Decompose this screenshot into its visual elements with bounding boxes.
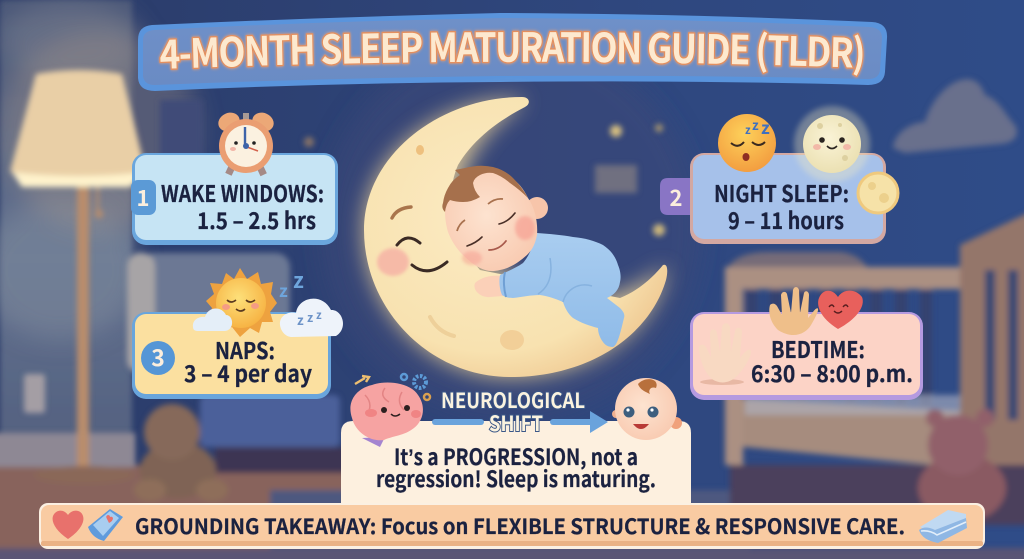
icon: sleeping sun with clouds	[193, 265, 343, 337]
icon: smiling moon	[794, 106, 870, 182]
icon: sleeping face emoji	[718, 114, 776, 172]
crescent moon	[364, 97, 667, 377]
badge 3: 3	[151, 339, 165, 373]
badge 1	[131, 180, 156, 215]
panel: neurological shift: regression! Sleep is maturing.	[376, 462, 656, 494]
icon: sleeping face emoji: z	[752, 115, 759, 134]
card 3: naps: 3 – 4 per day	[184, 355, 312, 389]
floor left	[0, 465, 420, 559]
outlet	[24, 374, 45, 413]
card 3: naps	[132, 312, 331, 399]
icon: small golden moon	[858, 173, 898, 213]
crib	[725, 252, 870, 275]
large cloud with zzz	[280, 299, 343, 337]
badge 3	[141, 339, 175, 375]
card 2: night sleep	[660, 153, 886, 244]
neurological shift label: NEUROLOGICAL	[441, 385, 585, 415]
large cloud with zzz: z	[297, 310, 304, 329]
small cloud	[193, 308, 232, 331]
right floor	[730, 465, 1024, 525]
night sleep text: NIGHT SLEEP:	[714, 175, 849, 209]
icon: open palm hand	[699, 323, 751, 385]
icon: heart	[53, 511, 83, 539]
icon: alarm clock	[215, 109, 277, 176]
progression text: It’s a PROGRESSION, not a	[394, 440, 638, 472]
baby blue sleeper	[499, 233, 624, 347]
card 2: night sleep: 9 – 11 hours	[728, 202, 844, 236]
icon: sleeping sun with clouds: z	[293, 265, 304, 295]
arrow: brain to baby	[435, 411, 608, 433]
icon: waving hand tan	[769, 287, 818, 335]
neurological shift label: SHIFT	[489, 408, 543, 438]
card 4: bedtime	[690, 312, 923, 400]
icon: blue book	[88, 509, 123, 541]
hanging stars	[610, 125, 622, 137]
armchair	[140, 253, 290, 373]
icon: smiling baby head	[612, 378, 682, 440]
icon: sleeping sun with clouds: z	[279, 277, 288, 302]
pink teddy	[918, 454, 1006, 522]
wall cloud	[893, 79, 1017, 153]
moon face	[377, 145, 524, 350]
badge 2: 2	[670, 181, 682, 213]
naps text: NAPS:	[215, 332, 275, 366]
bedtime text: BEDTIME:	[771, 331, 865, 365]
panel: neurological shift	[341, 421, 691, 503]
baby hand	[474, 276, 503, 297]
lamp	[77, 182, 89, 472]
icon: smiling heart	[818, 291, 863, 329]
card 4: bedtime: 6:30 – 8:00 p.m.	[751, 355, 913, 389]
wake windows text: WAKE WINDOWS:	[161, 175, 324, 209]
title banner	[138, 13, 888, 91]
large cloud with zzz: z	[316, 307, 322, 323]
badge 2	[660, 178, 690, 215]
teddy bear	[140, 442, 216, 498]
icon: folded blanket	[919, 510, 967, 543]
icon: gears	[401, 374, 430, 400]
moon and sleeping baby illustration	[364, 97, 667, 377]
large cloud with zzz: z	[307, 309, 313, 326]
icon: sleeping face emoji: z	[761, 114, 770, 139]
icon: brain	[350, 376, 423, 447]
icon: sleeping face emoji: z	[745, 122, 751, 138]
title text: 4-MONTH SLEEP MATURATION GUIDE (TLDR)	[158, 28, 866, 79]
takeaway text: GROUNDING TAKEAWAY: Focus on FLEXIBLE STRUCTURE & RESPONSIVE CARE.	[135, 511, 905, 541]
rug and floor center	[270, 490, 750, 559]
baby head	[442, 166, 548, 271]
picture frame	[160, 100, 202, 162]
neurological shift label	[441, 385, 585, 438]
card 1: wake windows	[131, 153, 338, 245]
badge 1: 1	[137, 181, 149, 213]
panel: grounding takeaway	[39, 503, 985, 549]
baseboard	[0, 433, 135, 467]
card 1: wake windows: 1.5 – 2.5 hrs	[197, 202, 316, 236]
